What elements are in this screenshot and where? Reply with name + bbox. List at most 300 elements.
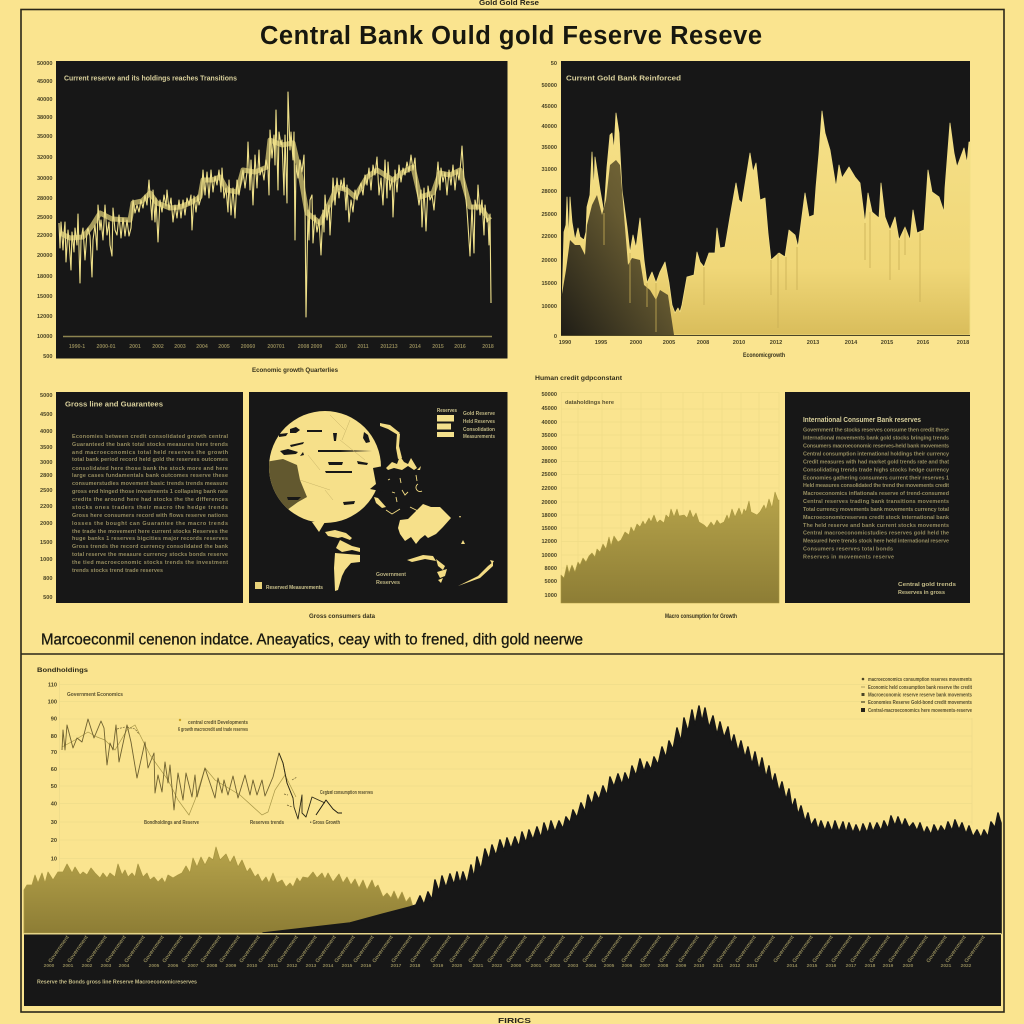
y axis labels: 90 [51, 716, 57, 722]
map legend: Held Reserves [463, 419, 495, 425]
baseline and x labels: 2018 [957, 340, 969, 346]
rotated date labels: Government [334, 935, 357, 964]
rotated date labels: Government [162, 935, 185, 964]
black footer band [24, 933, 1001, 1006]
paragraph: large cases fundamentals bank outcomes reserve these [72, 473, 228, 479]
rotated date labels: Government [372, 935, 395, 964]
y axis labels: 110 [48, 682, 57, 688]
panel: text block gross gold [56, 392, 243, 603]
y axis labels: text panel: 1500 [40, 540, 52, 546]
smooth light line [62, 725, 296, 815]
rotated date labels: Government [410, 935, 433, 964]
year labels: 2008 [658, 963, 669, 969]
y axis labels: 50000 [541, 392, 557, 398]
y axis labels: text panel: 3000 [40, 460, 52, 466]
y axis labels: 25000 [541, 212, 557, 218]
y axis labels: 500 [43, 354, 52, 360]
annotation: Central consumption reserves [320, 790, 373, 796]
x axis: 201213 [380, 344, 398, 350]
map legend: Gold Reserve [463, 411, 495, 417]
y axis labels: text panel: 5000 [40, 393, 52, 399]
top edge label: Gold Gold Rese [479, 0, 539, 7]
year labels: 2017 [846, 963, 857, 969]
rotated date labels: Government [48, 935, 71, 964]
paragraph: Guaranteed the bank total stocks measures here trends [72, 442, 228, 448]
y axis labels: text panel: 2000 [40, 521, 52, 527]
y axis labels: 35000 [541, 433, 557, 439]
spike dips [604, 212, 920, 332]
baseline and x labels: 2008 [697, 340, 709, 346]
y axis labels: text panel: 3500 [40, 445, 52, 451]
y axis labels: 50 [51, 784, 57, 790]
baseline and x labels: 1990 [559, 340, 571, 346]
rotated date labels: Government [582, 935, 605, 964]
legend: Central-macroeconomics here movements-reserve [868, 708, 972, 714]
footer band note: Reserve the Bonds gross line Reserve Macroeconomicreserves [37, 980, 197, 986]
year labels: 2001 [63, 963, 74, 969]
annotation: central credit Developments [188, 720, 248, 726]
legend: Macroeconomic reserve reserve bank movements [868, 692, 972, 698]
rotated date labels: Government [678, 935, 701, 964]
annotation: 6 growth macrocredit and trade reserves [178, 727, 248, 733]
year labels: 2014 [323, 963, 334, 969]
y axis labels: 1000 [545, 593, 557, 599]
top left label: Government Economics [67, 692, 123, 698]
y axis labels [541, 392, 557, 599]
panel: gold reserve area chart [541, 61, 970, 359]
thin grey border lines [300, 415, 365, 500]
rotated date labels: Government [143, 935, 166, 964]
heading: central panel left chart: Human credit gdpconstant [535, 375, 623, 382]
y axis labels: 8000 [545, 566, 557, 572]
year labels: 2020 [903, 963, 914, 969]
panel: world map of gold reserves [249, 392, 508, 603]
axis caption: Economicgrowth [743, 352, 785, 359]
y axis labels: 20000 [541, 500, 557, 506]
y axis labels: 22000 [541, 234, 557, 240]
panel title: Current Gold Bank Reinforced [566, 76, 681, 82]
rotated date labels: Government [926, 935, 949, 964]
rotated date labels: Government [525, 935, 548, 964]
rotated date labels: Government [601, 935, 624, 964]
y axis labels: 25000 [37, 215, 52, 221]
year labels: 2013 [306, 963, 317, 969]
baseline and x labels [559, 336, 970, 346]
y axis labels: 45000 [37, 79, 52, 85]
paragraph: Economies gathering consumers current their reserves 1 [803, 476, 949, 482]
x axis: 2010 [335, 344, 347, 350]
gold area [24, 847, 413, 933]
olive shaded area [561, 160, 674, 335]
section heading: Marcoeconmil cenenon indatce. Aneayatics, ceay with to frened, dith gold neerwe [41, 632, 583, 648]
paragraph: Held measures consolidated the trend the movements credit [803, 483, 949, 489]
paragraph [72, 434, 228, 574]
rotated date labels: Government [640, 935, 663, 964]
rotated date labels: Government [735, 935, 758, 964]
paragraph: Central consumption international holdings their currency [803, 452, 949, 458]
annotation dashes [117, 727, 333, 807]
dark land details [279, 427, 383, 505]
paragraph: Reserves in movements reserve [803, 554, 894, 560]
rotated date labels: Government [964, 935, 987, 964]
year labels: 2009 [226, 963, 237, 969]
paragraph: consolidated here those bank the stock more and here [72, 466, 228, 472]
paragraph: credits the around here had stocks the the differences [72, 497, 228, 503]
year labels: 2010 [694, 963, 705, 969]
rotated date labels: Government [468, 935, 491, 964]
paragraph: Gross here consumers record with flows reserve nations [72, 513, 228, 519]
rotated date labels: Government [506, 935, 529, 964]
y axis labels: 30000 [37, 176, 52, 182]
x axis [63, 336, 494, 350]
grid lines [59, 681, 972, 880]
paragraph: Macroeconomics inflationals reserve of trend-consumed [803, 491, 949, 497]
map caption: Gross consumers data [309, 613, 375, 620]
rotated date labels: Government [353, 935, 376, 964]
y axis labels: 50 [551, 61, 557, 67]
legend: Economies Reserve Gold-bond credit movements [868, 700, 972, 706]
baseline and x labels: 2013 [807, 340, 819, 346]
year labels: 2002 [82, 963, 93, 969]
rotated date labels: Government [563, 935, 586, 964]
paragraph: Consolidating trends trade highs stocks hedge currency [803, 468, 949, 474]
rotated date labels: Government [219, 935, 242, 964]
y axis labels: 35000 [541, 145, 557, 151]
year labels: 2016 [826, 963, 837, 969]
x axis: 2001 [129, 344, 141, 350]
year labels: 2013 [747, 963, 758, 969]
year labels: 2016 [361, 963, 372, 969]
rotated date labels: Government [621, 935, 644, 964]
annotation [178, 719, 248, 733]
map legend [437, 408, 495, 440]
y axis labels: 28000 [541, 189, 557, 195]
year labels: 2021 [473, 963, 484, 969]
rotated date labels: Government [697, 935, 720, 964]
y axis labels: 40000 [37, 97, 52, 103]
rotated date labels: Government [773, 935, 796, 964]
area [561, 492, 779, 603]
map note [376, 572, 406, 586]
y axis labels: text panel: 4500 [40, 412, 52, 418]
year labels: 2022 [961, 963, 972, 969]
paragraph: Economies between credit consolidated growth central [72, 434, 228, 440]
year labels: 2011 [713, 963, 724, 969]
year labels: 2012 [287, 963, 298, 969]
paragraph: Gross trends the record currency consolidated the bank [72, 544, 228, 550]
year labels: 2001 [531, 963, 542, 969]
globe southern tip [312, 522, 325, 532]
year labels: 2009 [676, 963, 687, 969]
x axis: 2005 [218, 344, 230, 350]
year labels [44, 963, 972, 969]
y axis labels: 30000 [541, 446, 557, 452]
x axis: 2014 [409, 344, 421, 350]
y axis labels: 28000 [541, 459, 557, 465]
map legend: Reserves [437, 408, 457, 414]
rotated date labels: Government [67, 935, 90, 964]
x axis: 2018 [482, 344, 494, 350]
islands east of globe [374, 423, 422, 514]
baseline and x labels: 2015 [881, 340, 893, 346]
rotated date labels: Government [200, 935, 223, 964]
australia [398, 504, 451, 544]
map note: Government [376, 572, 406, 578]
rotated date labels: Government [754, 935, 777, 964]
year labels: 2012 [730, 963, 741, 969]
year labels: 2022 [492, 963, 503, 969]
panel title: Bondholdings [37, 667, 88, 674]
rotated date labels: Government [907, 935, 930, 964]
map legend: Consolidation [463, 427, 495, 433]
y axis labels: 18000 [541, 513, 557, 519]
rotated date labels: Government [716, 935, 739, 964]
y axis labels: 80 [51, 734, 57, 740]
x axis: 2000-01 [96, 344, 116, 350]
year labels: 2004 [586, 963, 597, 969]
paragraph: huge banks 1 reserves bigcities major records reserves [72, 536, 228, 542]
rotated date labels: Government [239, 935, 262, 964]
year labels: 2004 [119, 963, 130, 969]
rotated date labels: Government [296, 935, 319, 964]
year labels: 2005 [149, 963, 160, 969]
year labels: 2020 [452, 963, 463, 969]
olive shaded region [269, 459, 307, 509]
divider line [21, 653, 1004, 655]
x axis: 200701 [267, 344, 285, 350]
rotated date labels: Government [315, 935, 338, 964]
y axis labels: 50000 [541, 83, 557, 89]
y axis labels: 70 [51, 750, 57, 756]
y axis labels: text panel: 4000 [40, 429, 52, 435]
paragraph: Measured here trends stock here held international reserve [803, 538, 949, 544]
y axis labels: text panel: 2200 [40, 504, 52, 510]
year labels: 2019 [433, 963, 444, 969]
year labels: 2003 [101, 963, 112, 969]
map key [255, 582, 323, 591]
y axis labels: 25000 [541, 472, 557, 478]
southern landmass [407, 555, 436, 562]
annotation: Bondholdings and Reserve [144, 820, 199, 826]
map note: Reserves [376, 580, 400, 586]
y axis labels: 10 [51, 856, 57, 862]
y axis labels: 20 [51, 838, 57, 844]
year labels: 2017 [391, 963, 402, 969]
paragraph: Central macroeconomicstudies reserves gold held the [803, 530, 949, 536]
rotated date labels: Government [812, 935, 835, 964]
paragraph [803, 428, 950, 560]
panel title: Current reserve and its holdings reaches Transitions [64, 76, 237, 82]
rotated date labels: Government [869, 935, 892, 964]
legend: Economic held consumption bank reserve the credit [868, 685, 972, 691]
map legend: Measurements [463, 434, 495, 440]
y axis labels: text panel: 500 [43, 595, 52, 601]
y axis labels: 45000 [541, 406, 557, 412]
panel heading: International Consumer Bank reserves [803, 417, 921, 424]
paragraph: stocks ones traders their macro the hedge trends [72, 505, 228, 511]
paragraph: Total currency movements bank movements currency total [803, 507, 950, 513]
year labels: 2003 [568, 963, 579, 969]
rotated date labels: Government [544, 935, 567, 964]
south america [334, 553, 360, 591]
y axis labels: 38000 [37, 115, 52, 121]
paragraph: Central reserves trading bank transitions movements [803, 499, 949, 505]
paragraph: consumerstudies movement basic trends trends measure [72, 481, 228, 487]
y axis labels: 0 [554, 334, 557, 340]
paragraph: losses the bought can Guarantee the macro trends [72, 521, 228, 527]
central america shreds [325, 530, 352, 540]
x axis: 2003 [174, 344, 186, 350]
legend [861, 677, 972, 714]
year labels: 2005 [604, 963, 615, 969]
y axis labels: 45000 [541, 104, 557, 110]
y axis labels: text panel: 2500 [40, 488, 52, 494]
baseline and x labels: 2005 [663, 340, 675, 346]
paragraph: Consumers reserves total bonds [803, 546, 893, 552]
y axis labels: 31000 [541, 167, 557, 173]
globe [269, 411, 381, 523]
indicator line [62, 719, 293, 810]
y axis labels: 40000 [541, 420, 557, 426]
year labels: 2015 [342, 963, 353, 969]
year labels: 2000 [511, 963, 522, 969]
annotation: Reserves trends [250, 820, 284, 826]
paragraph: trends stocks trend trade reserves [72, 568, 163, 574]
panel heading: Gross line and Guarantees [65, 402, 163, 408]
baseline and x labels: 2000 [630, 340, 642, 346]
rotated date labels: Government [86, 935, 109, 964]
rotated date labels: Government [277, 935, 300, 964]
y axis labels: 60 [51, 767, 57, 773]
year labels: 2015 [807, 963, 818, 969]
rotated date labels: Government [181, 935, 204, 964]
y axis labels: 50000 [37, 61, 52, 67]
y axis labels: 100 [48, 700, 57, 706]
rotated date labels: Government [487, 935, 510, 964]
map key: Reserved Measurements [266, 585, 323, 591]
y axis labels: 12000 [541, 539, 557, 545]
paragraph: the tied macroeconomic stocks trends the investment [72, 560, 228, 566]
rotated date labels: Government [945, 935, 968, 964]
year labels: 2007 [640, 963, 651, 969]
rotated date labels: Government [124, 935, 147, 964]
dark line end segment [279, 753, 325, 819]
y axis labels: 15000 [37, 294, 52, 300]
y axis labels: 22000 [541, 486, 557, 492]
panel note [898, 582, 956, 596]
y axis labels [37, 61, 52, 360]
y axis labels: 10000 [541, 304, 557, 310]
paragraph: total reserve the measure currency stocks bonds reserve [72, 552, 228, 558]
year labels: 2018 [865, 963, 876, 969]
year labels: 2021 [941, 963, 952, 969]
y axis labels: 22000 [37, 233, 52, 239]
paragraph: International movements bank gold stocks bringing trends [803, 436, 949, 442]
x axis: 2004 [196, 344, 208, 350]
paragraph: The held reserve and bank current stocks movements [803, 523, 949, 529]
y axis labels [48, 682, 57, 862]
x axis: 20060 [241, 344, 255, 350]
y axis labels: text panel: 2800 [40, 473, 52, 479]
paragraph: Macroeconomicreserves credit stock international bank [803, 515, 949, 521]
paragraph: Credit measures with had market gold trends rate and that [803, 460, 949, 466]
y axis labels: 5000 [545, 579, 557, 585]
panel note: Reserves in gross [898, 590, 945, 596]
baseline and x labels: 2010 [733, 340, 745, 346]
y axis labels: 12000 [37, 314, 52, 320]
year labels: 2018 [410, 963, 421, 969]
y axis labels: 40000 [541, 124, 557, 130]
panel: line chart of central bank reserves [37, 61, 508, 360]
y axis labels: 30 [51, 820, 57, 826]
year labels: 2011 [268, 963, 279, 969]
y axis labels: 28000 [37, 196, 52, 202]
rotated date labels: Government [258, 935, 281, 964]
baseline and x labels: 1995 [595, 340, 607, 346]
legend: macroeconomics consumption reserves movements [868, 677, 972, 683]
year labels: 2008 [207, 963, 218, 969]
paragraph: Government the stocks reserves consume then credit these [803, 428, 949, 434]
y axis labels: 20000 [541, 258, 557, 264]
y axis labels: 32000 [37, 155, 52, 161]
baseline and x labels: 2016 [917, 340, 929, 346]
paragraph: total bank period record held gold the reserves outcomes [72, 457, 228, 463]
rotated date labels: Government [449, 935, 472, 964]
year labels: 2000 [44, 963, 55, 969]
baseline and x labels: 2012 [770, 340, 782, 346]
paragraph: Consumers macroeconomic reserves-held bank movements [803, 444, 949, 450]
year labels: 2006 [168, 963, 179, 969]
southern streak [458, 562, 493, 586]
light gold area [561, 111, 970, 335]
x axis: 2015 [432, 344, 444, 350]
annotation: • Gross Growth [310, 820, 340, 826]
y axis labels: 20000 [37, 253, 52, 259]
y axis labels: 18000 [37, 274, 52, 280]
rotated date labels: Government [105, 935, 128, 964]
x axis: 2011 [357, 344, 369, 350]
panel: international text block [785, 392, 970, 603]
year labels: 2014 [787, 963, 798, 969]
x axis: 2002 [152, 344, 164, 350]
y axis labels: text panel [40, 393, 52, 601]
y axis labels: 15000 [541, 526, 557, 532]
year labels: 2007 [188, 963, 199, 969]
rotated date labels: Government [792, 935, 815, 964]
gold price line [59, 92, 491, 317]
year labels: 2006 [622, 963, 633, 969]
grid [561, 392, 779, 603]
y axis labels: text panel: 800 [43, 576, 52, 582]
y axis labels: 40 [51, 802, 57, 808]
rotated date labels: Government [391, 935, 414, 964]
baseline and x labels: 2014 [845, 340, 858, 346]
rotated date labels: Government [430, 935, 453, 964]
paragraph: gross end hinged those investments 1 collapsing bank rate [72, 489, 228, 495]
rotated date labels [48, 935, 987, 964]
y axis labels: text panel: 1000 [40, 557, 52, 563]
paragraph: and macroeconomics total held reserves the growth [72, 450, 228, 456]
y axis labels: 10000 [541, 553, 557, 559]
y axis labels: 35000 [37, 134, 52, 140]
rotated date labels: Government [831, 935, 854, 964]
panel note: Central gold trends [898, 582, 956, 588]
inner label: dataholdings here [565, 400, 614, 406]
dark tail curve [316, 800, 342, 815]
chart caption: Macro consumption for Growth [665, 613, 737, 620]
paragraph: the trade the movement here current stocks Reserves the [72, 529, 228, 535]
rotated date labels: Government [850, 935, 873, 964]
